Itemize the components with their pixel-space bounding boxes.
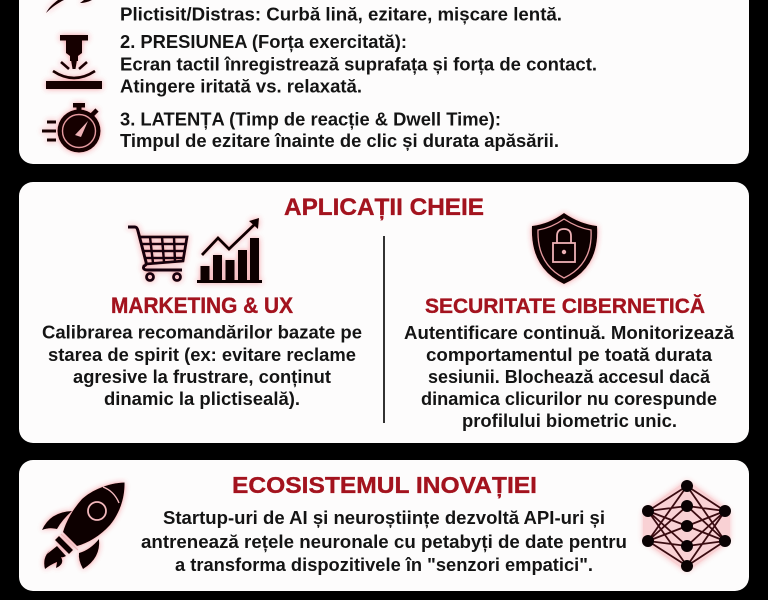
heading: cybersecurity: SECURITATE CIBERNETICĂ bbox=[425, 293, 705, 318]
text: marketing description: starea de spirit (ex: evitare reclame bbox=[48, 344, 356, 365]
text: cybersecurity description: sesiunii. Blochează accesul dacă bbox=[428, 366, 711, 387]
text: marketing description: Calibrarea recomandărilor bazate pe bbox=[42, 322, 362, 342]
text: latency: 3. LATENȚA (Timp de reacție & Dwell Time): bbox=[120, 108, 501, 130]
text: marketing description bbox=[42, 322, 362, 409]
icon: stopwatch bbox=[42, 103, 100, 152]
icon: rocket bbox=[42, 482, 125, 569]
text: cybersecurity description: Autentificare continuă. Monitorizează bbox=[404, 322, 735, 343]
icon: security shield bbox=[532, 213, 597, 284]
text: cybersecurity description: dinamica clicurilor nu corespunde bbox=[421, 388, 717, 409]
text: cybersecurity description: comportamentul pe toată durata bbox=[426, 344, 713, 365]
text: ecosystem description: antrenează rețele neuronale cu petabyți de date pentru bbox=[141, 531, 627, 552]
text: cybersecurity description: profilului biometric unic. bbox=[462, 410, 677, 431]
text: cybersecurity description bbox=[404, 322, 735, 431]
icon: neural network bbox=[642, 480, 731, 572]
text: latency bbox=[120, 108, 559, 151]
text: latency: Timpul de ezitare înainte de clic și durata apăsării. bbox=[120, 130, 559, 151]
panel: metrics bbox=[19, 0, 749, 164]
text: marketing description: dinamic la plictiseală). bbox=[104, 388, 300, 409]
icon: pressure press bbox=[46, 35, 102, 89]
heading: key applications: APLICAȚII CHEIE bbox=[284, 194, 484, 221]
text: bored or distracted: Plictisit/Distras: Curbă lină, ezitare, mișcare lentă. bbox=[120, 4, 562, 24]
panel: innovation ecosystem bbox=[19, 460, 749, 591]
heading: marketing and UX: MARKETING & UX bbox=[111, 293, 293, 318]
text: ecosystem description: Startup-uri de AI și neuroștiințe dezvoltă API-uri și bbox=[163, 507, 605, 528]
icon: growth chart bbox=[197, 218, 262, 283]
text: pressure: 2. PRESIUNEA (Forța exercitată): bbox=[120, 31, 407, 52]
text: marketing description: agresive la frustrare, conținut bbox=[73, 366, 331, 387]
panel: key applications bbox=[19, 182, 749, 443]
icon: cropped curve bbox=[46, 0, 92, 13]
icon: shopping cart bbox=[128, 227, 187, 280]
text: ecosystem description bbox=[141, 507, 627, 575]
column: cybersecurity bbox=[404, 293, 735, 431]
column: marketing and UX bbox=[42, 293, 362, 409]
text: pressure: Ecran tactil înregistrează suprafața și forța de contact. bbox=[120, 54, 597, 74]
text: ecosystem description: a transforma dispozitivele în "senzori empatici". bbox=[175, 554, 593, 575]
heading: innovation ecosystem: ECOSISTEMUL INOVAȚIEI bbox=[232, 472, 537, 498]
text: pressure bbox=[120, 31, 597, 96]
text: pressure: Atingere iritată vs. relaxată. bbox=[120, 76, 362, 96]
